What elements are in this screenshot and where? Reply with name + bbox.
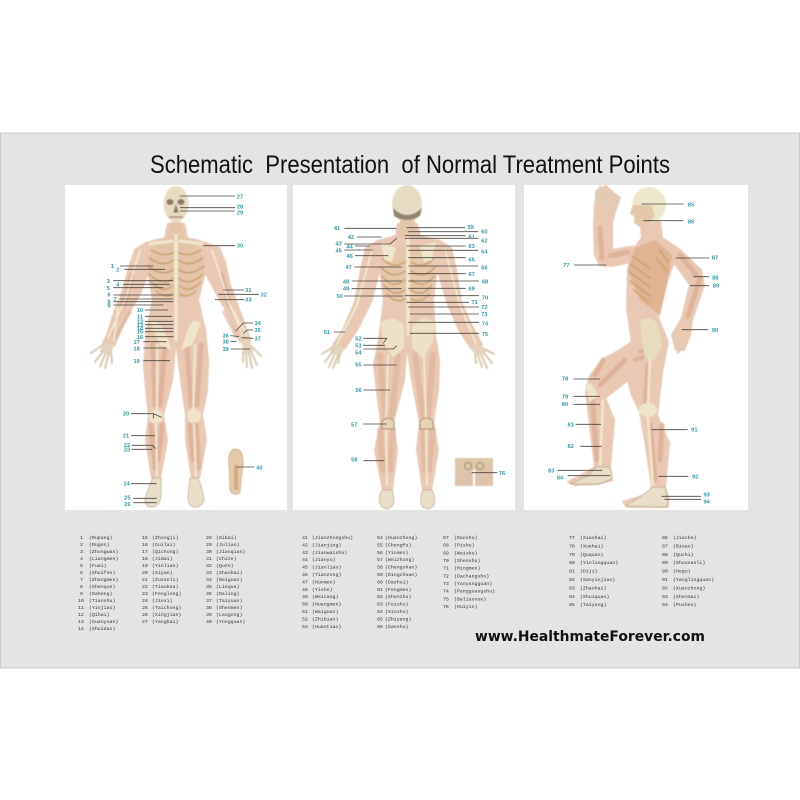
key: points 77-94: (Xuehai) <box>580 543 604 549</box>
key: points 1-40: 14 <box>78 626 84 632</box>
key: points 41-76: 46 <box>302 572 308 578</box>
key: points 77-94: (Shenmai) <box>673 594 699 600</box>
callouts: points 77-94: 86 <box>688 220 694 226</box>
key: points 41-76 <box>302 535 495 630</box>
key: points 41-76: 74 <box>443 589 449 595</box>
callouts: points 1-40: 28 <box>237 205 243 211</box>
key: points 41-76: 70 <box>443 558 449 564</box>
key: points 77-94: 84 <box>569 594 575 600</box>
key: points 41-76: 41 <box>302 535 308 541</box>
key: points 41-76: (Chengfu) <box>385 542 411 548</box>
key: points 77-94: 94 <box>662 602 668 608</box>
callouts: points 77-94: 77 <box>563 263 569 269</box>
panel: front view: 40 <box>256 465 262 471</box>
key: points 41-76: 59 <box>377 572 383 578</box>
callouts: points 41-76: 69 <box>469 287 475 293</box>
key: points 1-40: 13 <box>78 619 84 625</box>
panel: back view: 58 <box>351 458 357 464</box>
key: points 41-76: 48 <box>302 587 308 593</box>
key: points 1-40: 31 <box>206 556 212 562</box>
key: points 1-40: (Yangbai) <box>152 619 178 625</box>
key: points 1-40: 8 <box>80 584 83 590</box>
panel: side view: 91 <box>691 428 697 434</box>
panel: side view: 92 <box>692 474 698 480</box>
key: points 77-94: 80 <box>569 560 575 566</box>
key: points 41-76: (Yaoyangguan) <box>454 581 492 587</box>
key: points 41-76: 56 <box>377 550 383 556</box>
key: points 41-76: 57 <box>377 557 383 563</box>
callouts: points 41-76: 63 <box>469 244 475 250</box>
key: points 41-76: 64 <box>377 609 383 615</box>
key: points 1-40: (Jimai) <box>152 556 173 562</box>
key: points 41-76: (Weicang) <box>312 594 338 600</box>
callouts: points 41-76: 55 <box>355 363 361 369</box>
key: points 41-76: 61 <box>377 587 383 593</box>
panel: side view: 79 <box>562 394 568 400</box>
key: points 1-40: 3 <box>80 549 83 555</box>
key: points 41-76: 76 <box>443 604 449 610</box>
callouts: points 1-40: 31 <box>245 288 251 294</box>
key: points 1-40: (Guanyuan) <box>89 619 118 625</box>
key: points 1-40: 7 <box>80 577 83 583</box>
key: points 1-40: (Rugen) <box>89 542 110 548</box>
key: points 1-40: (Yinjiao) <box>89 605 115 611</box>
callouts: points 41-76: 66 <box>481 265 487 271</box>
callouts: points 41-76: 75 <box>482 332 488 338</box>
key: points 1-40: (Zusanli) <box>152 577 178 583</box>
key: points 41-76: (Xinshu) <box>385 609 409 615</box>
key: points 1-40: 26 <box>142 612 148 618</box>
callouts: points 1-40: 14 <box>137 326 144 332</box>
callouts: points 41-76 <box>324 225 489 369</box>
key: points 1-40: (Xiyan) <box>152 570 173 576</box>
panel: side view: 80 <box>562 402 568 408</box>
key: points 1-40: 12 <box>78 612 84 618</box>
callouts: points 1-40: 33 <box>245 298 251 304</box>
key: points 77-94: (Ququan) <box>580 552 604 558</box>
key: points 77-94: 79 <box>569 552 575 558</box>
key: points 41-76: (Zhibian) <box>312 616 338 622</box>
key: points 77-94: (Hegu) <box>673 569 691 575</box>
panel: back view <box>293 185 515 510</box>
key: points 1-40: (Yinlian) <box>152 563 178 569</box>
website url: www.HealthmateForever.com <box>475 629 705 645</box>
key: points 1-40: (Zhongwan) <box>89 549 118 555</box>
key: points 1-40: (Qihai) <box>89 612 110 618</box>
key: points 77-94: (Taiyang) <box>580 602 606 608</box>
panel: front view <box>65 185 287 510</box>
key: points 1-40: 1 <box>80 535 83 541</box>
key: points 41-76: (Weizhong) <box>385 557 414 563</box>
callouts: points 1-40: 39 <box>223 347 229 353</box>
key: points 41-76: 75 <box>443 596 449 602</box>
key: points 1-40: (Qichong) <box>152 549 178 555</box>
callouts: points 77-94: 89 <box>713 283 719 289</box>
key: points 1-40: (Xingjian) <box>152 612 181 618</box>
key: points 41-76: 53 <box>302 624 308 630</box>
key: points 77-94: (Diji) <box>580 569 598 575</box>
callouts: points 41-76: 73 <box>481 312 487 318</box>
key: points 1-40: 36 <box>206 591 212 597</box>
callouts: points 1-40: 12 <box>137 320 143 326</box>
key: points 77-94: 86 <box>662 535 668 541</box>
figure: back body <box>322 185 494 509</box>
key: points 41-76: 42 <box>302 542 308 548</box>
callouts: points 41-76: 68 <box>482 279 488 285</box>
key: points 1-40: (Taichong) <box>152 605 181 611</box>
panel: side view: 93 <box>704 492 710 498</box>
key: points 1-40: 27 <box>142 619 148 625</box>
key: points 41-76: (Huantiao) <box>312 624 341 630</box>
callouts: points 1-40: 9 <box>107 304 111 310</box>
callouts: points 41-76: 65 <box>469 258 475 264</box>
key: points 41-76: 62 <box>377 594 383 600</box>
figure: front body <box>91 186 261 507</box>
key: points 41-76: 43 <box>302 550 308 556</box>
key: points 41-76: 44 <box>302 557 308 563</box>
key: points 77-94: 90 <box>662 569 668 575</box>
callouts: points 77-94: 90 <box>712 328 718 334</box>
key: points 41-76: 47 <box>302 579 308 585</box>
key: points 77-94: 91 <box>662 577 668 583</box>
key: points 41-76: (Pangguangshu) <box>454 589 495 595</box>
callouts: points 1-40: 3 <box>107 279 110 285</box>
key: points 1-40: (Liangmen) <box>89 556 118 562</box>
key: points 77-94: 93 <box>662 594 668 600</box>
key: points 41-76: (Jianyu) <box>312 557 336 563</box>
panel: back view: 56 <box>356 388 362 394</box>
key: points 1-40: (Jiexi) <box>152 598 173 604</box>
key: points 1-40: (Laogong) <box>216 612 242 618</box>
callouts: points 77-94: 87 <box>712 256 718 262</box>
key: points 77-94: 82 <box>569 577 575 583</box>
callouts: points 1-40: 36 <box>223 334 229 340</box>
key: points 41-76: 60 <box>377 579 383 585</box>
key: points 1-40: (Lieque) <box>216 584 240 590</box>
key: points 1-40: 28 <box>206 535 212 541</box>
callouts: points 41-76: 71 <box>472 300 478 306</box>
panel: front view: 26 <box>124 502 130 508</box>
key: points 1-40: (Zhongji) <box>152 535 178 541</box>
key: points 1-40: 39 <box>206 612 212 618</box>
callouts: points 41-76: 52 <box>355 336 361 342</box>
key: points 1-40: 33 <box>206 570 212 576</box>
key: points 1-40: (Shuidao) <box>89 626 115 632</box>
key: points 1-40: 21 <box>142 577 148 583</box>
figure: side body <box>568 186 704 507</box>
key: points 1-40: 29 <box>206 542 212 548</box>
key: points 1-40: (Shaohai) <box>216 570 242 576</box>
key: points 1-40: (Sibai) <box>216 535 237 541</box>
callouts: points 1-40: 13 <box>137 323 143 329</box>
panel: front view: 23 <box>124 448 130 454</box>
key: points 1-40: (Yongquan) <box>216 619 245 625</box>
key: points 41-76: 65 <box>377 616 383 622</box>
panel: front view: 24 <box>124 482 131 488</box>
key: points 1-40: (Fuai) <box>89 563 107 569</box>
key: points 41-76: (Jianwaishu) <box>312 550 347 556</box>
key: points 41-76: 52 <box>302 616 308 622</box>
key: points 1-40: (Tianshu) <box>89 598 115 604</box>
key: points 41-76: (Fengmen) <box>385 587 411 593</box>
callouts: points 1-40 <box>107 195 267 365</box>
callouts: points 1-40: 34 <box>255 321 262 327</box>
panel: side view: 82 <box>568 444 574 450</box>
callouts: points 41-76: 59 <box>468 225 474 231</box>
callouts: points 41-76: 50 <box>337 294 343 300</box>
key: points 1-40: 10 <box>78 598 84 604</box>
key: points 1-40: 24 <box>142 598 148 604</box>
key: points 41-76: 67 <box>443 535 449 541</box>
key: points 1-40: 15 <box>142 535 148 541</box>
key: points 41-76: (Jianjing) <box>312 542 341 548</box>
key: points 1-40: (Chize) <box>216 556 237 562</box>
panel: side view: 84 <box>557 476 564 482</box>
callouts: points 41-76: 42 <box>348 235 354 241</box>
callouts: points 41-76: 47 <box>346 265 352 271</box>
key: points 1-40: (Shenque) <box>89 584 115 590</box>
callouts: points 41-76: 51 <box>324 330 330 336</box>
key: points 1-40: 35 <box>206 584 212 590</box>
key: points 41-76: (Huangmen) <box>312 602 341 608</box>
key: points 77-94: 85 <box>569 602 575 608</box>
key: points 77-94: (Binao) <box>673 543 694 549</box>
key: points 77-94 <box>569 535 714 608</box>
key: points 1-40: 22 <box>142 584 148 590</box>
key: points 77-94: 88 <box>662 552 668 558</box>
callouts: points 1-40: 8 <box>107 300 111 306</box>
key: points 1-40: 6 <box>80 570 83 576</box>
key: points 41-76: 69 <box>443 550 449 556</box>
key: points 1-40: (Shuifen) <box>89 570 115 576</box>
key: points 41-76: (Yinmen) <box>385 550 409 556</box>
key: points 41-76: (Hunmen) <box>312 579 336 585</box>
key: points 41-76: 72 <box>443 573 449 579</box>
key: points 1-40: (Neiguan) <box>216 577 242 583</box>
key: points 1-40: 5 <box>80 563 83 569</box>
key: points 77-94: 89 <box>662 560 668 566</box>
key: points 77-94: (Zhaohai) <box>580 585 606 591</box>
key: points 1-40 <box>78 535 245 632</box>
key: points 1-40: 34 <box>206 577 212 583</box>
key: points 41-76: (Dazhui) <box>385 579 409 585</box>
callouts: points 1-40: 19 <box>134 359 140 365</box>
callouts: points 41-76: 44 <box>347 244 354 250</box>
key: points 41-76: 49 <box>302 594 308 600</box>
key: points 77-94: (Pushen) <box>673 602 697 608</box>
key: points 1-40: (Jianqian) <box>216 549 245 555</box>
callouts: points 41-76: 48 <box>343 279 349 285</box>
key: points 77-94: (Shousanli) <box>673 560 705 566</box>
key: points 1-40: 19 <box>142 563 148 569</box>
callouts: points 1-40: 10 <box>137 308 143 314</box>
key: points 41-76: (Jianzhongshu) <box>312 535 353 541</box>
callouts: points 41-76: 67 <box>469 272 475 278</box>
callouts: points 41-76: 41 <box>334 226 340 232</box>
key: points 1-40: 25 <box>142 605 148 611</box>
key: points 41-76: (Weishu) <box>454 550 478 556</box>
key: points 41-76: 68 <box>443 543 449 549</box>
callouts: points 1-40: 17 <box>134 340 140 346</box>
panel: side view: 78 <box>562 377 568 383</box>
key: points 77-94: 77 <box>569 535 575 541</box>
key: points 1-40: (Quze) <box>216 563 234 569</box>
key: points 1-40: (Guilai) <box>152 542 176 548</box>
key: points 77-94: 78 <box>569 543 575 549</box>
key: points 77-94: (Quchi) <box>673 552 694 558</box>
key: points 1-40: 38 <box>206 605 212 611</box>
key: points 1-40: 9 <box>80 591 83 597</box>
callouts: points 41-76: 45 <box>336 249 342 255</box>
callouts: points 41-76: 60 <box>481 229 487 235</box>
key: points 41-76: (Chengshan) <box>385 565 417 571</box>
callouts: points 41-76: 61 <box>469 235 475 241</box>
callouts: points 1-40: 37 <box>255 336 261 342</box>
key: points 41-76: 63 <box>377 602 383 608</box>
callouts: points 41-76: 64 <box>481 250 488 256</box>
callouts: points 1-40: 32 <box>261 293 267 299</box>
panel: back view: 76 <box>499 471 505 477</box>
callouts: points 1-40: 4 <box>116 282 120 288</box>
callouts: points 41-76: 72 <box>481 305 487 311</box>
key: points 1-40: 20 <box>142 570 148 576</box>
key: points 77-94: (Yanglingquan) <box>673 577 714 583</box>
key: points 1-40: (Rupang) <box>89 535 113 541</box>
key: points 77-94: (Shuiquan) <box>580 594 609 600</box>
key: points 77-94: (Xuanzhong) <box>673 585 705 591</box>
callouts: points 41-76: 74 <box>482 322 489 328</box>
callouts: points 1-40: 30 <box>237 244 243 250</box>
key: points 1-40: 30 <box>206 549 212 555</box>
callouts: points 1-40: 18 <box>134 346 140 352</box>
callouts: points 1-40: 15 <box>137 330 143 336</box>
key: points 1-40: 40 <box>206 619 212 625</box>
callouts: points 41-76: 54 <box>355 350 362 356</box>
callouts: points 1-40: 6 <box>107 292 111 298</box>
panel: side view: 83 <box>548 468 554 474</box>
panel: front view: 25 <box>124 496 130 502</box>
callouts: points 1-40: 11 <box>137 314 143 320</box>
title: Schematic Presentation of Normal Treatment Points <box>150 151 670 179</box>
key: points 41-76: (Huiyin) <box>454 604 478 610</box>
key: points 77-94: (Xiaohai) <box>580 535 606 541</box>
key: points 1-40: (Taiyuan) <box>216 598 242 604</box>
panel: side view: 94 <box>704 499 711 505</box>
key: points 41-76: (Baliaoxue) <box>454 596 486 602</box>
key: points 41-76: 51 <box>302 609 308 615</box>
key: points 1-40: (Tiaokou) <box>152 584 178 590</box>
callouts: points 77-94: 85 <box>688 202 694 208</box>
panel: side view: 81 <box>568 422 574 428</box>
callouts: points 41-76: 62 <box>481 238 487 244</box>
key: points 41-76: 45 <box>302 565 308 571</box>
key: points 41-76: (Shenzhu) <box>385 594 411 600</box>
key: points 1-40: 2 <box>80 542 83 548</box>
callouts: points 1-40: 2 <box>116 268 119 274</box>
key: points 41-76: (Tianzong) <box>312 572 341 578</box>
key: points 77-94: (Yinlingquan) <box>580 560 618 566</box>
key: points 1-40: (Fenglong) <box>152 591 181 597</box>
key: points 41-76: (Waiguan) <box>312 609 338 615</box>
key: points 1-40: 4 <box>80 556 83 562</box>
key: points 41-76: (Ganshu) <box>385 624 409 630</box>
callouts: points 1-40: 5 <box>107 286 110 292</box>
panel: front view: 21 <box>123 434 129 440</box>
key: points 41-76: (Dachangshu) <box>454 573 489 579</box>
key: points 41-76: (Zhiyang) <box>385 616 411 622</box>
key: points 77-94: 81 <box>569 569 575 575</box>
key: points 41-76: 54 <box>377 535 383 541</box>
key: points 41-76: (Jianliao) <box>312 565 341 571</box>
callouts: points 1-40: 29 <box>237 210 243 216</box>
callouts: points 1-40: 7 <box>113 297 117 303</box>
key: points 41-76: (Yishe) <box>312 587 333 593</box>
key: points 41-76: 66 <box>377 624 383 630</box>
panel: front view: 20 <box>123 412 129 418</box>
key: points 77-94: 83 <box>569 585 575 591</box>
callouts: points 41-76: 53 <box>355 343 361 349</box>
key: points 1-40: 18 <box>142 556 148 562</box>
callouts: points 41-76: 70 <box>482 295 488 301</box>
key: points 41-76: 50 <box>302 602 308 608</box>
callouts: points 1-40: 27 <box>237 195 243 201</box>
key: points 77-94: 87 <box>662 543 668 549</box>
key: points 41-76: (Huanzhong) <box>385 535 417 541</box>
background panel <box>0 133 800 668</box>
callouts: points 77-94: 88 <box>712 275 718 281</box>
key: points 41-76: 55 <box>377 542 383 548</box>
callouts: points 1-40: 16 <box>137 335 143 341</box>
key: points 1-40: (Daheng) <box>89 591 113 597</box>
key: points 1-40: 37 <box>206 598 212 604</box>
callouts: points 1-40: 35 <box>255 328 261 334</box>
key: points 77-94: 92 <box>662 585 668 591</box>
key: points 1-40: 23 <box>142 591 148 597</box>
callouts: points 77-94 <box>563 202 719 334</box>
key: points 1-40: (Juliao) <box>216 542 240 548</box>
key: points 1-40: (Daling) <box>216 591 240 597</box>
callouts: points 1-40: 38 <box>223 339 229 345</box>
key: points 41-76: (Mingmen) <box>454 566 480 572</box>
key: points 1-40: 17 <box>142 549 148 555</box>
key: points 77-94: (Jiache) <box>673 535 697 541</box>
key: points 41-76: (Danshu) <box>454 535 478 541</box>
key: points 41-76: 71 <box>443 566 449 572</box>
key: points 41-76: 73 <box>443 581 449 587</box>
callouts: points 41-76: 43 <box>336 241 342 247</box>
panel: front view: 22 <box>124 443 130 449</box>
key: points 1-40: 16 <box>142 542 148 548</box>
key: points 77-94: (Sanyinjiao) <box>580 577 615 583</box>
panel: back view: 57 <box>351 422 357 428</box>
panel: side view <box>524 185 748 510</box>
callouts: points 1-40: 1 <box>111 264 114 270</box>
key: points 1-40: 11 <box>78 605 84 611</box>
callouts: points 41-76: 46 <box>347 254 353 260</box>
key: points 1-40: (Zhangmen) <box>89 577 118 583</box>
key: points 41-76: (Feishu) <box>385 602 409 608</box>
key: points 41-76: (Dingchuan) <box>385 572 417 578</box>
key: points 41-76: (Pishu) <box>454 543 475 549</box>
key: points 41-76: (Shenshu) <box>454 558 480 564</box>
key: points 41-76: 58 <box>377 565 383 571</box>
callouts: points 41-76: 49 <box>343 287 349 293</box>
key: points 1-40: (Shenmen) <box>216 605 242 611</box>
key: points 1-40: 32 <box>206 563 212 569</box>
